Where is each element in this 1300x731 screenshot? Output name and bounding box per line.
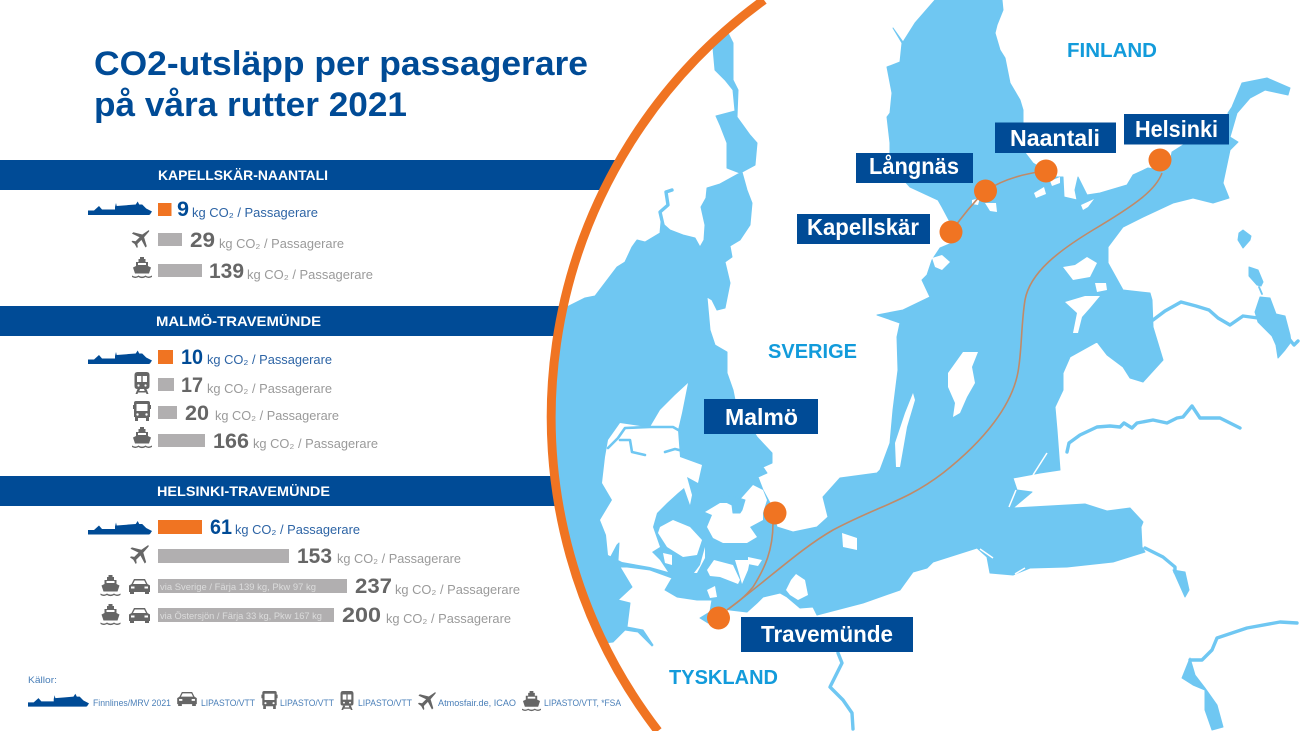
label: TYSKLAND: TYSKLAND bbox=[669, 667, 778, 689]
row: plane 153 kg: 153 bbox=[297, 545, 332, 568]
heading: HELSINKI-TRAVEMÜNDE bbox=[157, 483, 330, 499]
row: via Sverige 237 kg: via Sverige / Färja 139 kg, Pkw 97 kg bbox=[160, 582, 316, 593]
row: train 17 kg: kg CO₂ / Passagerare bbox=[207, 381, 332, 396]
row: bus 20 kg: 20 bbox=[185, 402, 209, 425]
row: plane 153 kg bbox=[130, 545, 461, 568]
port: Långnäs: Långnäs bbox=[869, 153, 959, 179]
row: bus 20 kg bbox=[133, 401, 339, 425]
row: bus 20 kg: kg CO₂ / Passagerare bbox=[215, 408, 339, 423]
sea and lakes bbox=[540, 0, 1290, 650]
panel: Helsinki-Travemünde bbox=[88, 483, 520, 627]
Isefjord bbox=[727, 498, 746, 514]
row: ship 139 kg bbox=[132, 257, 373, 283]
row: plane 29 kg bbox=[132, 229, 344, 252]
port: Helsinki: Helsinki bbox=[1135, 116, 1218, 142]
heading: KAPELLSKÄR-NAANTALI bbox=[158, 167, 328, 183]
row: train 17 kg: 17 bbox=[181, 374, 203, 397]
title: på våra rutter 2021 bbox=[94, 86, 407, 124]
panel: Kapellskär-Naantali bbox=[88, 167, 373, 283]
row: via Östersjön 200 kg bbox=[100, 604, 511, 627]
row: ship 166 kg bbox=[132, 427, 378, 453]
port: Kapellskär: Kapellskär bbox=[807, 214, 919, 240]
row: via Östersjön 200 kg: 200 bbox=[342, 604, 381, 627]
row: ferry 61 kg bbox=[88, 516, 360, 539]
port: Naantali: Naantali bbox=[1010, 125, 1100, 151]
sources legend: LIPASTO/VTT bbox=[201, 698, 255, 709]
port: Långnäs bbox=[856, 153, 997, 202]
row: ship 139 kg: kg CO₂ / Passagerare bbox=[247, 267, 373, 282]
routes bbox=[727, 171, 1162, 610]
sources legend: Källor: bbox=[28, 675, 57, 686]
port: Travemünde bbox=[707, 606, 913, 652]
rivers and inland lakes bbox=[660, 190, 1298, 730]
orange circle outline bbox=[551, 0, 764, 731]
title bbox=[94, 45, 588, 124]
port: Malmö bbox=[704, 399, 818, 524]
row: plane 29 kg: kg CO₂ / Passagerare bbox=[219, 236, 344, 251]
islands of Denmark bbox=[658, 352, 978, 600]
row: ferry 61 kg: 61 bbox=[210, 516, 232, 539]
row: plane 29 kg: 29 bbox=[190, 229, 215, 252]
port: Helsinki bbox=[1124, 114, 1229, 172]
row: ferry 10 kg bbox=[88, 346, 332, 369]
Ringkøbing fjord bbox=[610, 542, 620, 560]
title: CO2-utsläpp per passagerare bbox=[94, 45, 588, 83]
heading: MALMÖ-TRAVEMÜNDE bbox=[156, 313, 321, 329]
Limfjord bbox=[608, 427, 683, 455]
Baltic islands bbox=[932, 177, 1107, 333]
row: plane 153 kg: kg CO₂ / Passagerare bbox=[337, 551, 461, 566]
sources legend bbox=[28, 675, 622, 711]
label: SVERIGE: SVERIGE bbox=[768, 341, 857, 363]
panel: Malmö-Travemünde bbox=[88, 313, 378, 453]
row: via Sverige 237 kg: 237 bbox=[355, 575, 392, 598]
row: train 17 kg bbox=[134, 372, 332, 397]
row: ferry 9 kg bbox=[88, 198, 318, 221]
label: FINLAND: FINLAND bbox=[1067, 40, 1157, 62]
sources legend: Atmosfair.de, ICAO bbox=[438, 698, 516, 709]
row: via Sverige 237 kg bbox=[100, 575, 520, 598]
row: ferry 9 kg: kg CO₂ / Passagerare bbox=[192, 205, 318, 220]
panel: route header bars bbox=[0, 160, 640, 506]
port: Malmö: Malmö bbox=[725, 404, 798, 430]
row: ship 166 kg: kg CO₂ / Passagerare bbox=[253, 436, 378, 451]
sources legend: LIPASTO/VTT bbox=[358, 698, 412, 709]
row: ferry 61 kg: kg CO₂ / Passagerare bbox=[235, 522, 360, 537]
Jutland bbox=[600, 383, 702, 572]
sources legend: LIPASTO/VTT, *FSA bbox=[544, 698, 622, 709]
row: via Östersjön 200 kg: via Östersjön / Färja 33 kg, Pkw 167 kg bbox=[160, 611, 322, 622]
row: via Sverige 237 kg: kg CO₂ / Passagerare bbox=[395, 582, 520, 597]
sources legend: LIPASTO/VTT bbox=[280, 698, 334, 709]
row: ferry 9 kg: 9 bbox=[177, 198, 189, 221]
map: Baltic Sea region bbox=[540, 0, 1298, 730]
port: Travemünde: Travemünde bbox=[761, 621, 893, 647]
row: ferry 10 kg: 10 bbox=[181, 346, 203, 369]
row: ferry 10 kg: kg CO₂ / Passagerare bbox=[207, 352, 332, 367]
row: ship 166 kg: 166 bbox=[213, 430, 249, 453]
port: Kapellskär bbox=[797, 214, 962, 244]
row: ship 139 kg: 139 bbox=[209, 260, 244, 283]
port: Naantali bbox=[995, 122, 1116, 182]
spits and lagoons bbox=[980, 453, 1047, 574]
row: via Östersjön 200 kg: kg CO₂ / Passagerare bbox=[386, 611, 511, 626]
map background bbox=[551, 0, 1300, 731]
sources legend: Finnlines/MRV 2021 bbox=[93, 698, 171, 709]
